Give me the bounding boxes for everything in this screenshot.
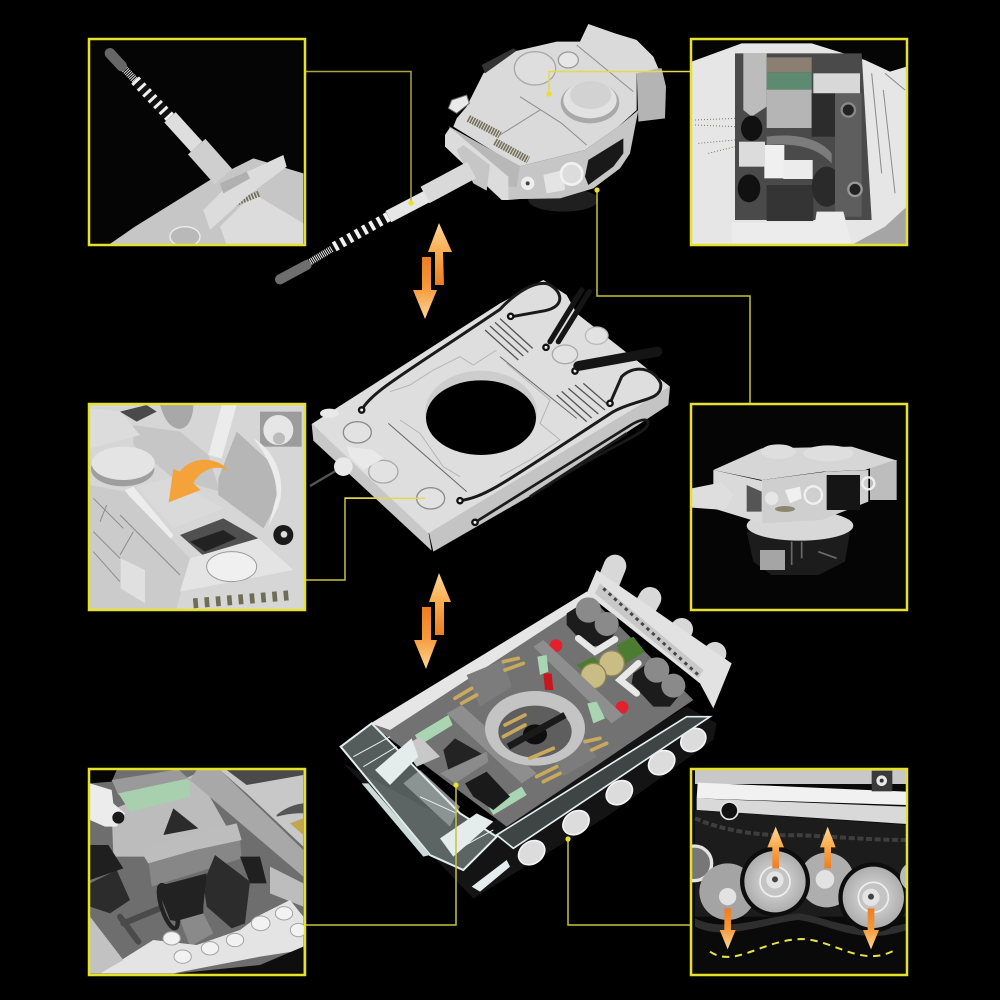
hatch callout line: [345, 496, 425, 500]
lower band: [697, 798, 907, 824]
brick seams: [93, 498, 180, 582]
hull interior floor: [372, 593, 693, 827]
middle road wheel: [799, 853, 854, 907]
upper grey band: [695, 770, 907, 784]
black floor disc: [812, 166, 835, 206]
panel: turret interior: [691, 39, 907, 245]
studs: [163, 907, 306, 963]
left lever: [90, 783, 125, 827]
track layer: [695, 810, 907, 917]
hatch bumps: [761, 444, 853, 461]
centre wall: [767, 90, 812, 128]
dark strip: [227, 770, 303, 785]
open hatch lid: [218, 432, 280, 528]
smoke panel: [827, 475, 860, 510]
track tools: [550, 290, 657, 366]
driver seat area: [403, 737, 510, 827]
upper left block: [120, 412, 140, 436]
lower face with weathering: [180, 572, 303, 608]
white stud plate: [100, 900, 303, 973]
weathering speckles: [695, 118, 735, 153]
tank chassis with interior: [341, 566, 732, 898]
beam: [190, 770, 303, 877]
hatch ring: [170, 227, 200, 247]
panel: turret base: [691, 404, 907, 610]
driver hatches: [343, 327, 608, 509]
roof seam lines: [500, 45, 633, 145]
turret shell: [692, 43, 907, 245]
engine louvers rear left: [485, 319, 533, 360]
curved orange arrow: [169, 460, 229, 502]
steering ring: [155, 883, 182, 930]
rings on side: [805, 477, 874, 504]
turret roof: [453, 24, 658, 167]
track guard strip: [497, 717, 710, 848]
panel: gun close-up: [104, 48, 304, 244]
bottom track: [177, 947, 303, 975]
basket light struts: [792, 542, 837, 565]
grey basket block: [760, 550, 785, 570]
top left void: [90, 770, 117, 783]
curved seat rail: [767, 136, 832, 163]
hull fragment: [108, 158, 303, 245]
panel: suspension: [677, 769, 930, 975]
front plate: [180, 538, 293, 592]
mantlet shoulder: [448, 126, 520, 187]
lid ring: [253, 438, 281, 527]
commander hatch: [561, 81, 619, 123]
vertical rails: [208, 405, 237, 458]
rear wall shading: [133, 425, 220, 492]
top right light: [220, 770, 303, 847]
up arrow: [428, 223, 452, 285]
left brick wall: [90, 485, 190, 608]
left wall: [743, 53, 767, 117]
right dark wall: [812, 93, 835, 137]
spoked wheel: [677, 846, 712, 881]
front cap: [207, 552, 257, 582]
turret assembly with gun: [280, 24, 666, 279]
dark lower floor: [157, 873, 207, 927]
plate seams: [390, 350, 560, 477]
white band: [697, 783, 907, 805]
exhausts: [607, 566, 715, 667]
gun barrel: [280, 170, 472, 279]
hull hole: [721, 802, 738, 819]
connector: driver detail to chassis: [305, 782, 459, 925]
arrow down one: [720, 908, 736, 949]
knob: [273, 525, 293, 545]
rear stowage frame: [587, 570, 732, 708]
stowage bin: [870, 460, 897, 500]
connector: hatch detail to hull hatch: [305, 495, 428, 580]
turret base: [528, 188, 598, 212]
left white hull edge: [371, 592, 597, 730]
back wall: [112, 773, 227, 857]
cross beams: [447, 640, 623, 783]
mint cylinder: [118, 778, 191, 812]
lever hole: [112, 812, 124, 824]
front block: [121, 558, 145, 603]
arrow up one: [767, 827, 784, 868]
upper track links: [695, 818, 907, 840]
white block: [764, 145, 813, 179]
central gearbox top: [140, 823, 242, 863]
seat black front: [203, 855, 250, 928]
hull top plate: [137, 478, 223, 528]
dark floor: [767, 185, 813, 221]
brass: [290, 818, 303, 835]
icon socket: [872, 771, 892, 791]
left transmission: [90, 870, 130, 913]
up arrow: [429, 573, 451, 635]
dashed travel path: [710, 939, 895, 957]
turret side wall: [493, 110, 638, 200]
black tow cable two: [460, 369, 661, 501]
mantlet dark gap: [747, 485, 762, 512]
panel: driver compartment: [89, 769, 306, 975]
connector: suspension detail to wheels: [565, 836, 691, 925]
vision port: [765, 492, 778, 505]
gun mantlet: [445, 127, 508, 200]
red parts: [543, 639, 628, 714]
front hull details: [320, 409, 383, 476]
cable eye bolts: [359, 314, 613, 525]
central gearbox face: [148, 838, 242, 887]
front wall: [312, 424, 432, 551]
rear black strip: [482, 48, 517, 73]
down arrow: [413, 257, 437, 319]
wheel right edge: [900, 862, 930, 892]
circuit green board: [767, 72, 812, 90]
panel: hatch detail: [89, 404, 305, 610]
panel barrel: [110, 53, 223, 177]
weathering: [468, 118, 528, 160]
connector: turret interior to roof: [546, 72, 691, 97]
controls: [120, 908, 160, 942]
engine blocks: [567, 597, 687, 707]
front rim: [815, 212, 846, 220]
clip cluster: [785, 487, 802, 503]
engine louvers rear right: [557, 383, 608, 422]
barrel: [692, 482, 733, 510]
lower basket: [747, 532, 850, 575]
dark machinery right: [240, 857, 267, 883]
smoke dischargers panel: [585, 138, 623, 185]
white pipes: [578, 638, 638, 693]
right column: [835, 93, 862, 217]
loader hatch: [514, 52, 578, 85]
seat black rear: [163, 808, 198, 835]
connector: gun detail to barrel: [305, 72, 414, 206]
dark hole inside: [190, 530, 237, 552]
turret front: [713, 470, 762, 523]
down arrow: [414, 607, 437, 669]
right rear block: [813, 73, 860, 93]
gun mount: [260, 412, 302, 447]
turret roof: [713, 447, 895, 480]
ring collar: [747, 511, 853, 541]
weathering: [775, 506, 795, 512]
rail with clips: [125, 487, 173, 548]
brass shells: [455, 658, 607, 782]
interior well: [735, 53, 872, 220]
turret side: [762, 470, 868, 523]
right lower wall: [270, 867, 303, 907]
seam dark lines: [388, 357, 577, 492]
roof plate: [220, 193, 303, 245]
left bottom white: [90, 917, 123, 973]
open hole: [180, 518, 258, 556]
right plate seams: [872, 73, 905, 193]
seat block left: [739, 142, 765, 167]
arrow up two: [820, 827, 836, 868]
road wheels: [514, 724, 710, 870]
turret ring: [485, 691, 585, 766]
black tow cable three: [475, 420, 648, 522]
arrow down two: [863, 908, 879, 949]
dark hinge top: [120, 405, 157, 422]
front cab grid lines: [353, 737, 493, 850]
connector: turret base to base detail: [594, 187, 750, 404]
turret ring opening: [425, 371, 537, 455]
driver hatch: [91, 447, 155, 486]
transparent panels white parts: [362, 738, 510, 892]
ring one: [842, 103, 855, 117]
bottom corner dark: [852, 207, 907, 245]
track: [343, 707, 717, 898]
side wall: [428, 387, 670, 552]
front wheel one: [740, 847, 810, 917]
arrow pair: hull and chassis: [414, 573, 451, 669]
radio rack: [767, 57, 812, 72]
hull upper plate: [310, 280, 670, 552]
turret ring arc: [277, 803, 303, 817]
gun mount: [203, 155, 287, 230]
black tow cable one: [362, 283, 560, 410]
weathering patch: [193, 595, 293, 603]
ring two: [848, 183, 862, 196]
grey floor stud: [180, 913, 213, 947]
periscope blocks: [448, 95, 582, 193]
lower track links: [695, 913, 907, 936]
lower left knob: [738, 116, 762, 202]
arrow pair: turret and hull: [413, 223, 452, 319]
green radiators: [577, 637, 645, 689]
mint green parts: [415, 655, 605, 815]
rear road wheel: [699, 863, 756, 920]
machine gun: [310, 468, 340, 486]
front wheel two: [838, 862, 908, 932]
transparent front hull: [341, 723, 497, 870]
upper left drum: [90, 845, 123, 880]
turret ring at top: [160, 405, 193, 429]
top deck: [312, 280, 670, 533]
stowage bin: [637, 68, 666, 122]
infographic canvas: [88, 24, 908, 976]
weathering band: [236, 191, 260, 206]
panel frames: [89, 39, 907, 975]
grey top bricks: [112, 769, 190, 795]
